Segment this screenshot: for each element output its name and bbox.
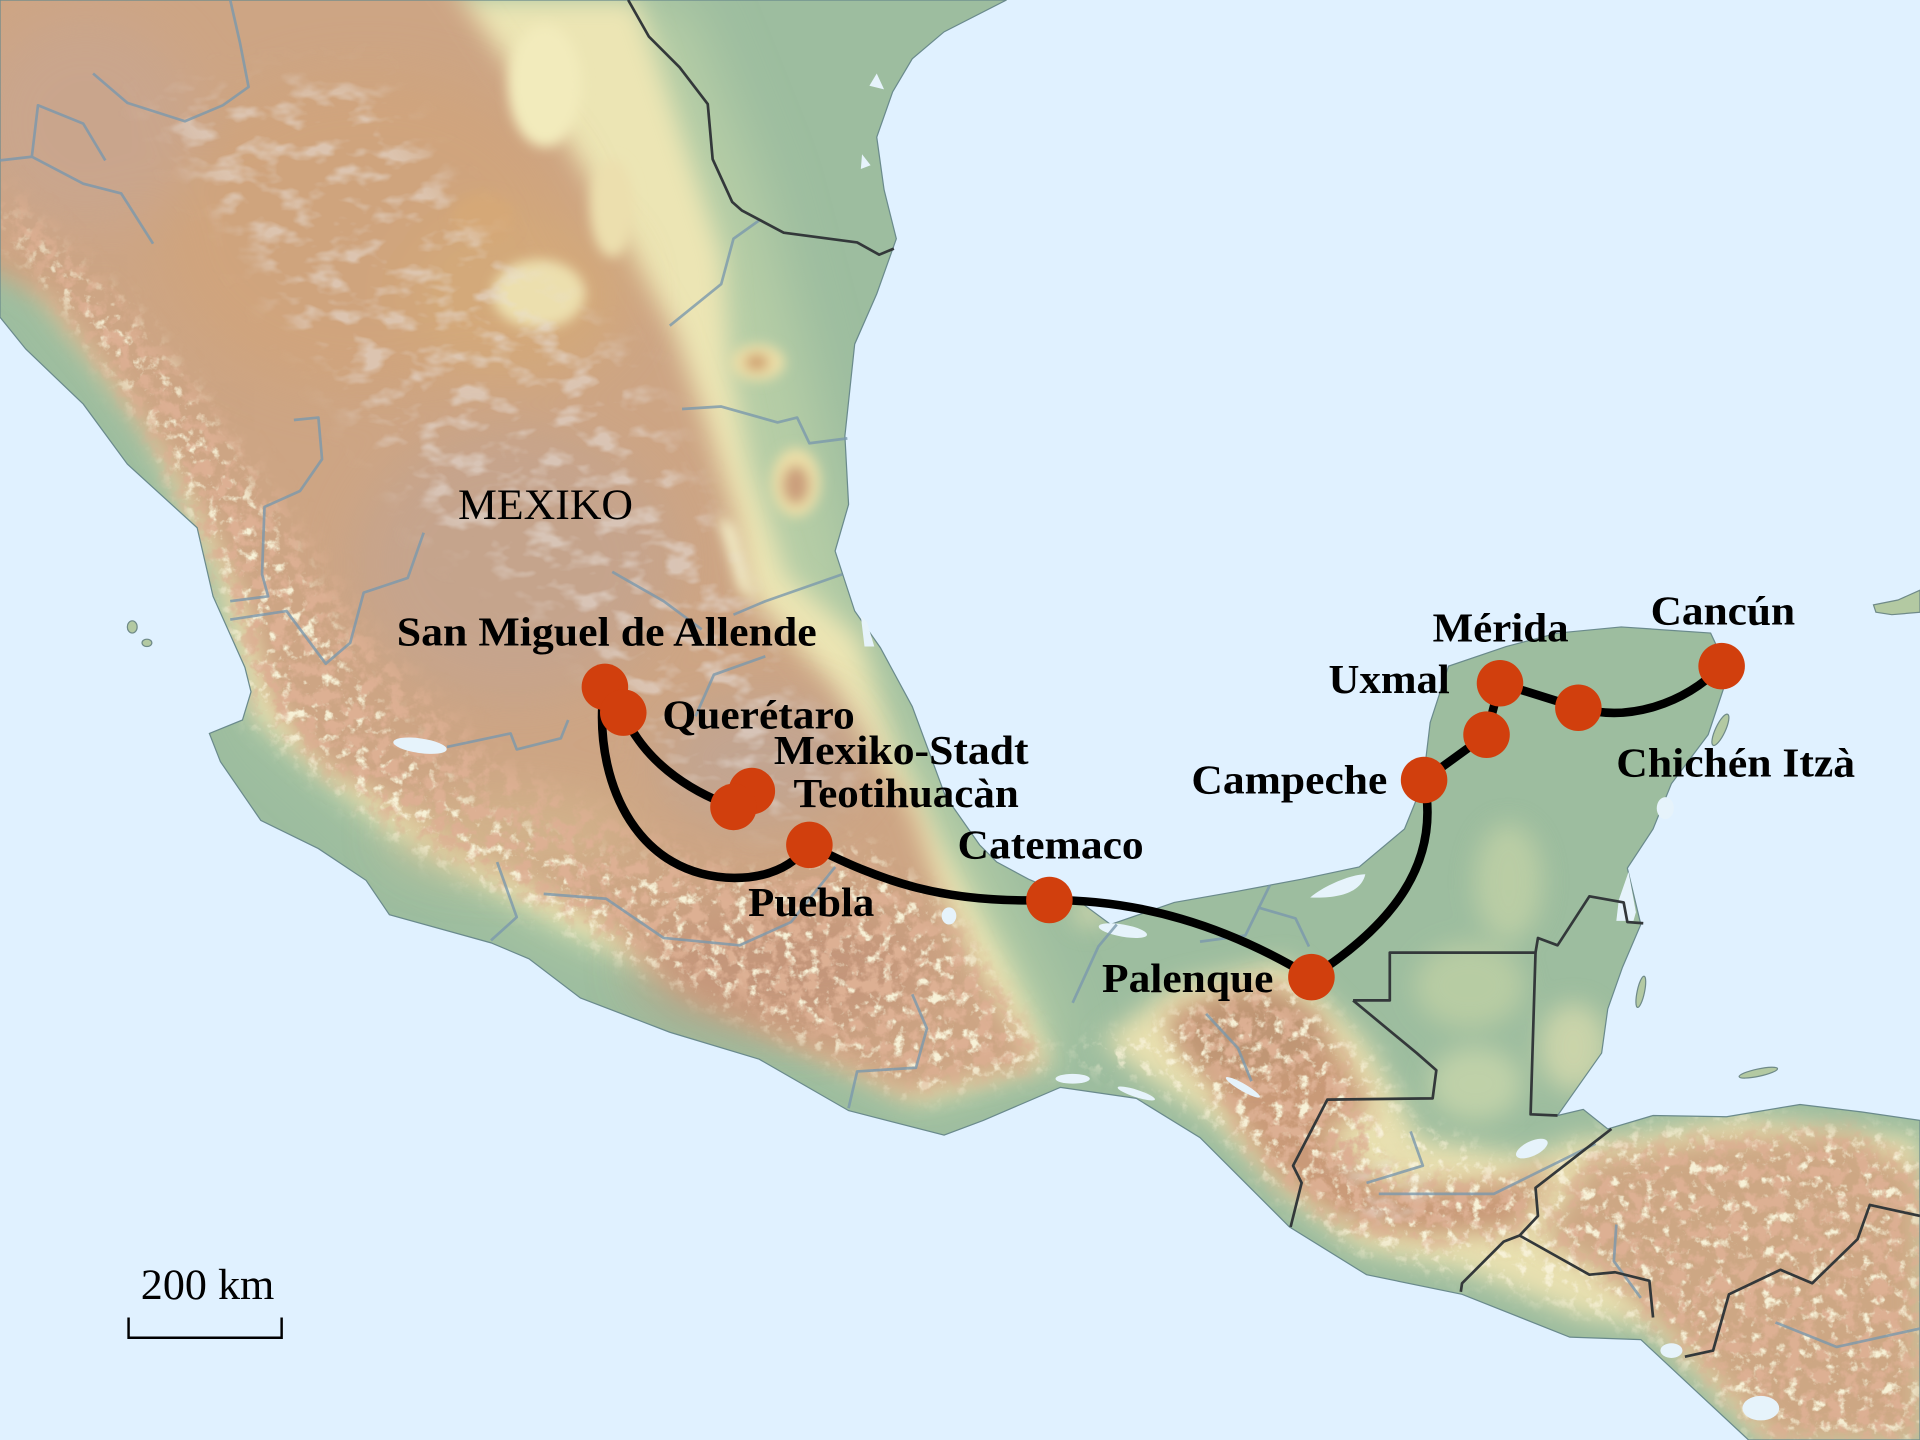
- place labels: Campeche: [1191, 757, 1387, 803]
- scale bar: [129, 1262, 282, 1338]
- place labels: Chichén Itzà: [1616, 740, 1855, 786]
- place labels: Querétaro: [662, 693, 855, 739]
- Yucatan highlights: [1071, 823, 1608, 1120]
- scale bar: 200 km: [141, 1262, 274, 1309]
- route line: [602, 666, 1722, 977]
- country borders: [628, 0, 1920, 1357]
- route stops: [582, 643, 1745, 1000]
- east Mexican hills: [488, 42, 826, 598]
- place labels: Cancún: [1651, 588, 1795, 634]
- Central America relief: [1102, 961, 1920, 1440]
- place labels: Puebla: [748, 880, 874, 926]
- place labels: Teotihuacàn: [793, 771, 1019, 817]
- place labels: San Miguel de Allende: [397, 609, 817, 655]
- place labels: [397, 588, 1855, 1002]
- place labels: Mexiko-Stadt: [774, 728, 1029, 774]
- coastal water details: [392, 73, 1779, 1420]
- place labels: Palenque: [1102, 956, 1273, 1002]
- place labels: Uxmal: [1329, 657, 1450, 703]
- place labels: Catemaco: [958, 822, 1144, 868]
- islands: [127, 590, 1920, 1080]
- country label: MEXIKO: [458, 482, 633, 529]
- place labels: Mérida: [1433, 606, 1569, 652]
